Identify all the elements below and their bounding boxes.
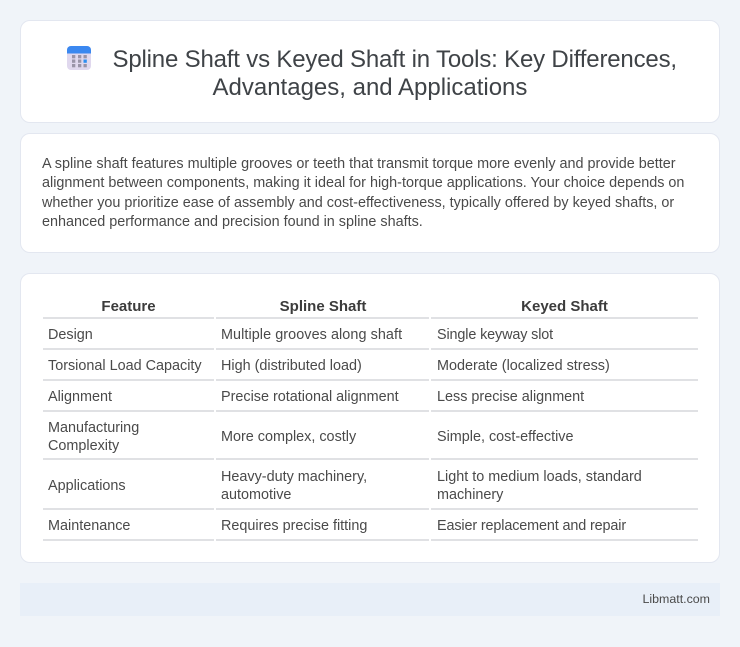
row: Design: Design [48, 327, 93, 343]
header: Keyed Shaft: Keyed Shaft [521, 298, 608, 315]
comparison table: Multiple grooves along shaft [221, 327, 402, 343]
header: Spline Shaft: Spline Shaft [280, 298, 366, 315]
panel: intro text card [20, 133, 720, 253]
intro paragraph: whether you prioritize ease of assembly and cost-effectiveness, typically offered by keyed shafts, or [42, 195, 674, 211]
comparison table: Requires precise fitting [221, 518, 367, 534]
row: Torsional Load Capacity: Torsional Load Capacity [48, 358, 202, 374]
comparison table: Less precise alignment [437, 389, 584, 405]
intro paragraph: A spline shaft features multiple grooves or teeth that transmit torque more evenly and provide better [42, 156, 676, 172]
comparison table: Precise rotational alignment [221, 389, 399, 405]
row: Manufacturing Complexity [48, 420, 139, 454]
comparison table: More complex, costly [221, 429, 356, 445]
panel: comparison table card [20, 273, 720, 563]
comparison table: Light to medium loads, standard [437, 469, 642, 485]
comparison table: Easier replacement and repair [437, 518, 626, 534]
intro paragraph [42, 156, 684, 230]
title [112, 46, 677, 101]
icon: calendar grid [67, 46, 91, 70]
comparison table: High (distributed load) [221, 358, 362, 374]
panel: title card [20, 20, 720, 123]
row: Maintenance: Maintenance [48, 518, 130, 534]
title: Spline Shaft vs Keyed Shaft in Tools: Key Differences, [112, 46, 677, 72]
intro paragraph: alignment between components, making it ideal for high-torque applications. Your choice depends on [42, 175, 684, 191]
comparison table: Moderate (localized stress) [437, 358, 610, 374]
header: Feature: Feature [101, 298, 156, 315]
row: Manufacturing Complexity: Complexity [48, 438, 119, 454]
comparison table: Simple, cost-effective [437, 429, 574, 445]
comparison table: Heavy-duty machinery, [221, 469, 367, 485]
intro paragraph: enhanced performance and precision found in spline shafts. [42, 214, 423, 230]
footer credit: Libmatt.com [643, 592, 710, 606]
row: Applications: Applications [48, 478, 126, 494]
comparison table [43, 298, 698, 541]
footer bar [20, 583, 720, 616]
row: Alignment: Alignment [48, 389, 112, 405]
comparison table: machinery [437, 487, 503, 503]
comparison table: Single keyway slot [437, 327, 553, 343]
row: Manufacturing Complexity: Manufacturing [48, 420, 139, 436]
comparison table: automotive [221, 487, 291, 503]
title: Advantages, and Applications [212, 74, 527, 101]
